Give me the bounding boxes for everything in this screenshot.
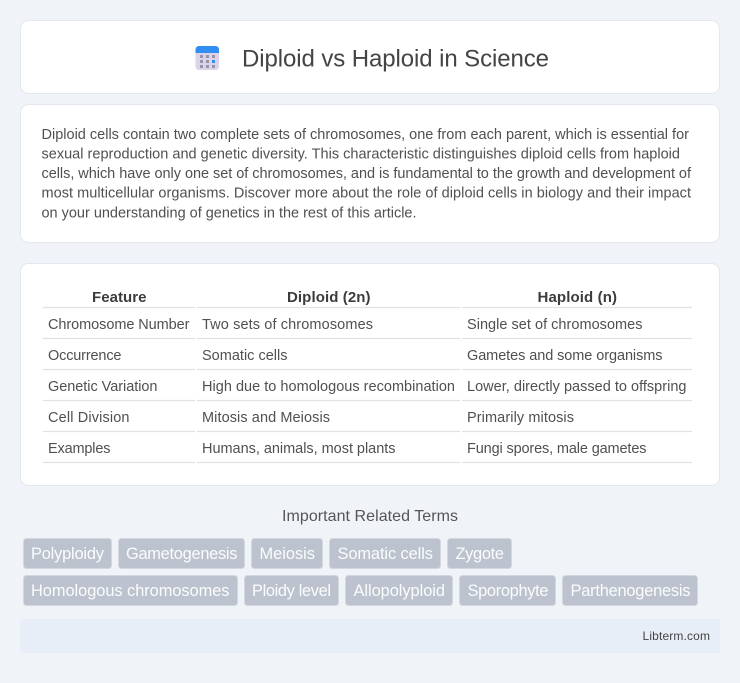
table header row: Haploid (n): [538, 289, 617, 306]
table row: occurrence: Somatic cells: [202, 348, 288, 364]
table row dividers: [43, 308, 692, 462]
tag: polyploidy: [24, 538, 112, 568]
table row: examples: [48, 441, 646, 457]
text block: introduction paragraph: [42, 127, 692, 222]
tag: allopolyploid: [346, 576, 452, 606]
text block: introduction paragraph: cells, which have only one set of chromosomes, and is fundamental to the growth and development of: [42, 166, 692, 182]
tag: homologous chromosomes: Homologous chromosomes: [31, 582, 230, 600]
tag: sporophyte: Sporophyte: [468, 582, 548, 600]
footer bar: [20, 619, 720, 653]
text block: introduction paragraph: on your understanding of genetics in the rest of this article.: [42, 206, 416, 222]
table row: chromosome number: Single set of chromosomes: [467, 317, 642, 333]
tag: meiosis: Meiosis: [260, 545, 315, 563]
footer source text: Libterm.com: [642, 629, 710, 643]
tag: somatic cells: [330, 538, 440, 568]
table row: cell division: [48, 410, 574, 426]
table row: chromosome number: Chromosome Number: [48, 317, 190, 333]
tag: gametogenesis: [118, 538, 244, 568]
table row: genetic variation: Genetic Variation: [48, 379, 158, 395]
tag: meiosis: [252, 538, 322, 568]
panel: introduction: [20, 104, 720, 242]
table row: genetic variation: [48, 379, 686, 395]
table row: cell division: Cell Division: [48, 410, 130, 426]
tag: gametogenesis: Gametogenesis: [126, 545, 238, 563]
table row: examples: Examples: [48, 441, 110, 457]
table row: genetic variation: High due to homologous recombination: [202, 379, 455, 395]
table row: occurrence: Gametes and some organisms: [467, 348, 662, 364]
table row: examples: Fungi spores, male gametes: [467, 441, 646, 457]
table row: examples: Humans, animals, most plants: [202, 441, 396, 457]
text block: introduction paragraph: most multicellular organisms. Discover more about the role of diploid cells in biology and their impact: [42, 186, 691, 202]
panel: comparison table: [20, 264, 720, 486]
tag: parthenogenesis: Parthenogenesis: [570, 582, 690, 600]
table header row: [92, 289, 617, 306]
text block: introduction paragraph: sexual reproduction and genetic diversity. This characteristic distinguishes diploid cells from haploid: [42, 146, 680, 162]
tag: allopolyploid: Allopolyploid: [354, 582, 445, 600]
text block: introduction paragraph: Diploid cells contain two complete sets of chromosomes, one from each parent, which is essential for: [42, 127, 689, 143]
table row: occurrence: Occurrence: [48, 348, 122, 364]
tag: polyploidy: Polyploidy: [31, 545, 105, 563]
table row: cell division: Primarily mitosis: [467, 410, 574, 426]
tag: parthenogenesis: [562, 576, 698, 606]
heading: important related terms: Important Related Terms: [282, 508, 458, 525]
tag: somatic cells: Somatic cells: [338, 545, 433, 563]
tag: homologous chromosomes: [24, 576, 238, 606]
tag: ploidy level: Ploidy level: [252, 582, 331, 600]
table row: chromosome number: Two sets of chromosomes: [202, 317, 373, 333]
icon: calendar grid: [196, 46, 219, 70]
table row: chromosome number: [48, 317, 642, 333]
table row: genetic variation: Lower, directly passed to offspring: [467, 379, 686, 395]
tag: zygote: [448, 538, 512, 568]
table row: cell division: Mitosis and Meiosis: [202, 410, 330, 426]
table row: occurrence: [48, 348, 662, 364]
title: Diploid vs Haploid in Science: [242, 46, 549, 72]
table header row: Diploid (2n): [287, 289, 370, 306]
tags: related terms: [24, 538, 698, 606]
table header row: Feature: [92, 289, 146, 306]
tag: sporophyte: [460, 576, 556, 606]
tag: zygote: Zygote: [456, 545, 504, 563]
panel: title header: [20, 20, 720, 94]
tag: ploidy level: [244, 576, 338, 606]
